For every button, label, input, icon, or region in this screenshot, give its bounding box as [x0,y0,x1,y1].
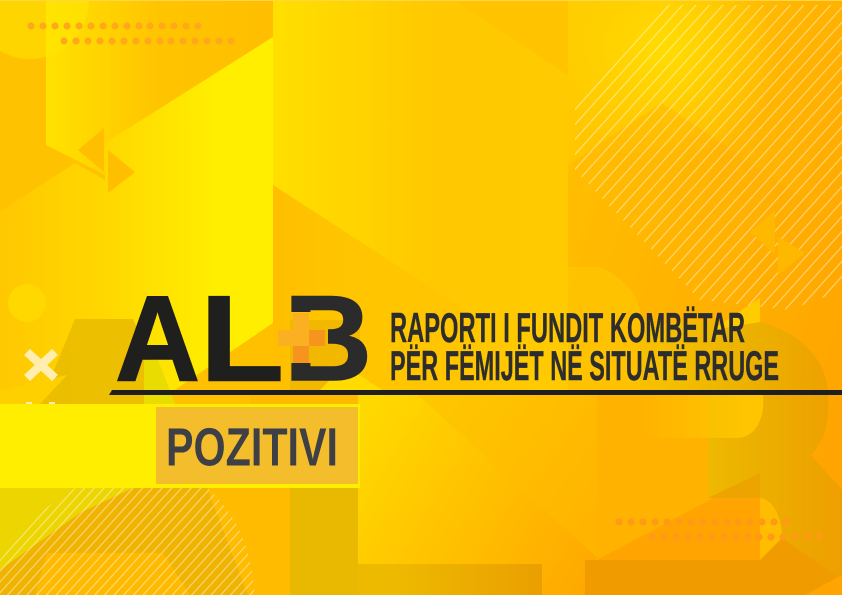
column behind numeral [290,320,360,404]
numeral bright curve [760,498,782,560]
lower-left yellow wedge [0,488,133,570]
orange wedge under logo [172,323,273,404]
letter A: A [115,270,200,406]
top-right hexagon [568,103,842,395]
plus sign [278,313,325,363]
letter B: B [284,270,372,406]
lower-left base [0,488,290,595]
numeral body [597,395,760,560]
A inner yellow strip [144,360,175,404]
central lower panel [273,185,568,395]
dots top left [27,22,235,45]
top-left circle [0,0,89,59]
bright triangle under text [318,365,385,392]
numeral dark tip [708,473,760,498]
hatch bottom left [0,488,255,595]
yellow diagonal panel [0,37,273,404]
numeral top highlight [640,395,763,438]
left lighter wedge [0,375,67,404]
right background [568,0,842,595]
numeral inner olive [708,438,760,498]
hatch top right [575,5,842,310]
lower middle panel [250,395,600,595]
top-left column [46,0,273,260]
yellow band [0,404,360,488]
numeral triangle [597,473,760,560]
lower-left dark A [0,488,248,595]
numeral olive [640,321,842,577]
dots bottom right [615,518,823,541]
lower panel light [358,395,600,595]
top edge [0,0,842,1]
x mark [27,352,55,378]
letter L: L [200,270,284,406]
lower-left counter [35,553,190,595]
circle left [8,284,46,322]
bright tip [712,298,760,330]
translucent letter A [40,319,172,404]
label box [156,407,358,484]
label text: POZITIVI [166,418,338,478]
right bulge [568,267,641,395]
translucent letter L [290,488,542,595]
arrows top left [78,128,135,193]
numeral bottom band [585,538,838,595]
heading [390,304,779,389]
second x mark tips [26,402,55,404]
top-right glow [550,0,790,170]
rule [109,390,842,395]
column rejoin [290,488,358,595]
central column [273,0,568,395]
logo: ALB [116,296,368,382]
arrows right [750,210,805,275]
lower panel upper-right [418,395,600,560]
top central triangle [455,0,568,75]
